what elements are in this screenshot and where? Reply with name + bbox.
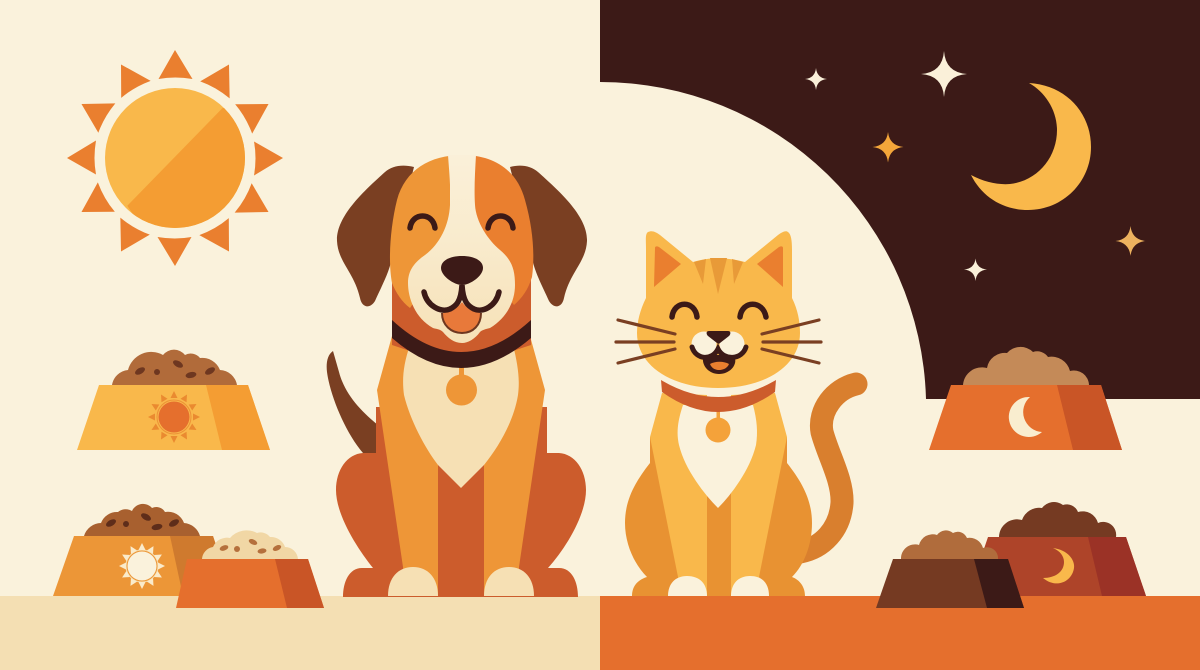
dog blaze and muzzle: [408, 155, 515, 343]
cat haunches: [625, 437, 812, 596]
dog nose: [441, 256, 483, 285]
dog mouth: [424, 285, 499, 310]
bowl: day front: [176, 530, 324, 608]
icon: star right: [1116, 226, 1146, 256]
dog neck shade: [392, 270, 531, 368]
dog haunches: [336, 407, 586, 597]
sun disc: [105, 88, 245, 228]
cat head: [637, 231, 800, 388]
floor: day side: [0, 596, 600, 670]
dog tongue: [442, 302, 481, 333]
background: night sky panel: [600, 0, 1200, 399]
dog: [327, 155, 587, 597]
food mound: [999, 502, 1116, 537]
icon: white sun: [119, 543, 165, 589]
bowl: day back: [53, 504, 233, 596]
cat collar: [661, 380, 776, 412]
kibble: [219, 538, 282, 554]
cat inner ears: [654, 246, 783, 287]
bowl shaded side: [974, 559, 1024, 608]
dog front legs: [377, 336, 545, 596]
food mound: [112, 350, 237, 385]
bowl shaded side: [1057, 385, 1122, 450]
dog bib: [403, 345, 519, 488]
bowl: night back: [968, 502, 1146, 596]
cat smile: [692, 347, 746, 357]
icon: sun: [67, 50, 283, 266]
bowl body: [176, 559, 324, 608]
cat forehead stripes: [694, 258, 743, 294]
icon: crescent moon: [971, 83, 1091, 210]
icon: cream moon: [1009, 397, 1042, 437]
cat whiskers: [616, 320, 821, 363]
cat front legs: [650, 393, 787, 596]
cat tag: [706, 410, 730, 442]
bowl body: [968, 537, 1146, 596]
sun rays: [67, 50, 283, 266]
food mound: [901, 530, 998, 559]
kibble: [134, 359, 216, 379]
icon: star large: [921, 51, 967, 97]
dog head right: [462, 155, 533, 305]
dog head left: [390, 155, 462, 308]
food mound: [963, 347, 1089, 385]
bowl body: [77, 385, 270, 450]
cat open mouth: [703, 355, 735, 374]
icon: star small top: [805, 68, 827, 90]
dog collar: [392, 320, 531, 368]
food mound: [202, 530, 298, 559]
dog paws: [388, 567, 534, 596]
bowl body: [876, 559, 1024, 608]
dog tongue outline: [442, 313, 481, 333]
dog ears: [337, 166, 587, 306]
cat paws: [668, 576, 769, 596]
bowl body: [53, 536, 233, 596]
food mound: [84, 504, 200, 536]
icon: small sun: [148, 391, 200, 443]
bowl shaded side: [1088, 537, 1146, 596]
cat tongue: [710, 362, 729, 370]
cat nose: [707, 331, 730, 344]
bowl body: [929, 385, 1122, 450]
cat bib: [678, 405, 757, 508]
cat tail: [800, 384, 856, 552]
floor: night side: [600, 596, 1200, 670]
dog tail: [327, 351, 378, 453]
bowl: day top: [77, 350, 270, 450]
dog chest stripe: [438, 440, 484, 597]
icon: star small bottom: [964, 258, 987, 281]
dog eyes: [410, 216, 513, 228]
bowl shaded side: [275, 559, 324, 608]
bowl shaded side: [170, 536, 233, 596]
bowl shaded side: [206, 385, 270, 450]
icon: gold moon: [1043, 548, 1074, 583]
icon: star gold: [872, 132, 904, 162]
cat muzzle: [692, 332, 744, 356]
bowl: night front: [876, 530, 1024, 608]
cat: [616, 231, 856, 596]
bowl: night top: [929, 347, 1122, 450]
dog tag: [446, 366, 477, 406]
kibble: [105, 512, 180, 531]
cat eyes: [672, 304, 766, 317]
